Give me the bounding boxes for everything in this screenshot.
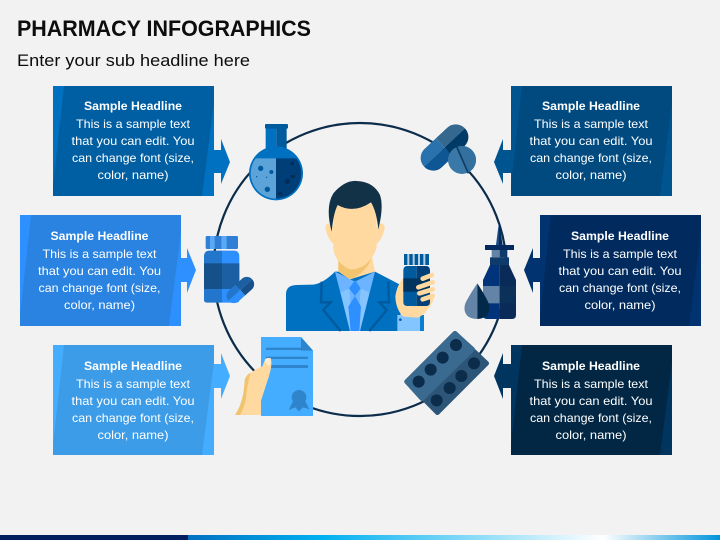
- panel: middle left: color, name): [64, 298, 135, 312]
- arrow: bottom left: [214, 353, 230, 399]
- panel: bottom right: can change font (size,: [530, 411, 652, 425]
- panel: middle right: that you can edit. You: [558, 264, 682, 278]
- central ring: [214, 123, 506, 416]
- panel: top left: [53, 86, 214, 196]
- panel: top left: color, name): [98, 168, 169, 182]
- panel: top right: can change font (size,: [530, 151, 652, 165]
- panel: top right: color, name): [556, 168, 627, 182]
- panel: middle right: [540, 215, 701, 326]
- panel: bottom left: color, name): [98, 428, 169, 442]
- panel: bottom left: Sample Headline: [84, 359, 182, 373]
- icon: blister pack: [407, 333, 487, 413]
- arrow: bottom right: [494, 353, 511, 399]
- panel: middle left: that you can edit. You: [38, 264, 161, 278]
- panel: top left: that you can edit. You: [72, 134, 194, 148]
- arrow: top right: [494, 139, 511, 184]
- panel: bottom right: color, name): [556, 428, 627, 442]
- footer bar: [0, 535, 720, 540]
- icon: pill bottle: [204, 236, 257, 306]
- panel: top right: that you can edit. You: [530, 134, 652, 148]
- panel: top right: [511, 86, 672, 196]
- panel: bottom left: [53, 345, 214, 455]
- panel: top left: Sample Headline: [84, 99, 182, 113]
- panel: middle right: can change font (size,: [559, 281, 681, 295]
- panel: middle right: Sample Headline: [571, 229, 669, 243]
- panel: bottom left: can change font (size,: [72, 411, 194, 425]
- panel: top right: This is a sample text: [534, 117, 649, 131]
- panel: bottom right: This is a sample text: [534, 377, 649, 391]
- panel: middle right: This is a sample text: [563, 247, 678, 261]
- title: PHARMACY INFOGRAPHICS: [17, 16, 311, 41]
- panel: top right: Sample Headline: [542, 99, 640, 113]
- panel: top left: This is a sample text: [76, 117, 191, 131]
- arrow: middle left: [181, 248, 196, 293]
- panel: bottom left: that you can edit. You: [72, 394, 194, 408]
- panel: middle right: color, name): [584, 298, 656, 312]
- panel: top left: can change font (size,: [72, 151, 194, 165]
- icon: nasal spray and drop: [464, 222, 516, 319]
- panel: bottom left: This is a sample text: [76, 377, 191, 391]
- arrow: middle right: [524, 248, 540, 293]
- panel: bottom right: [511, 345, 672, 455]
- panel: middle left: Sample Headline: [50, 229, 149, 243]
- pharmacist figure: [286, 181, 433, 331]
- arrow: top left: [214, 139, 230, 184]
- panel: middle left: This is a sample text: [42, 247, 157, 261]
- panel: bottom right: Sample Headline: [542, 359, 640, 373]
- icon: capsule and tablet: [420, 124, 476, 174]
- subtitle: Enter your sub headline here: [17, 51, 250, 70]
- panel: middle left: [20, 215, 181, 326]
- icon: certificate and hand: [235, 337, 313, 416]
- icon: flask: [249, 124, 303, 200]
- panel: bottom right: that you can edit. You: [530, 394, 652, 408]
- panel: middle left: can change font (size,: [38, 281, 160, 295]
